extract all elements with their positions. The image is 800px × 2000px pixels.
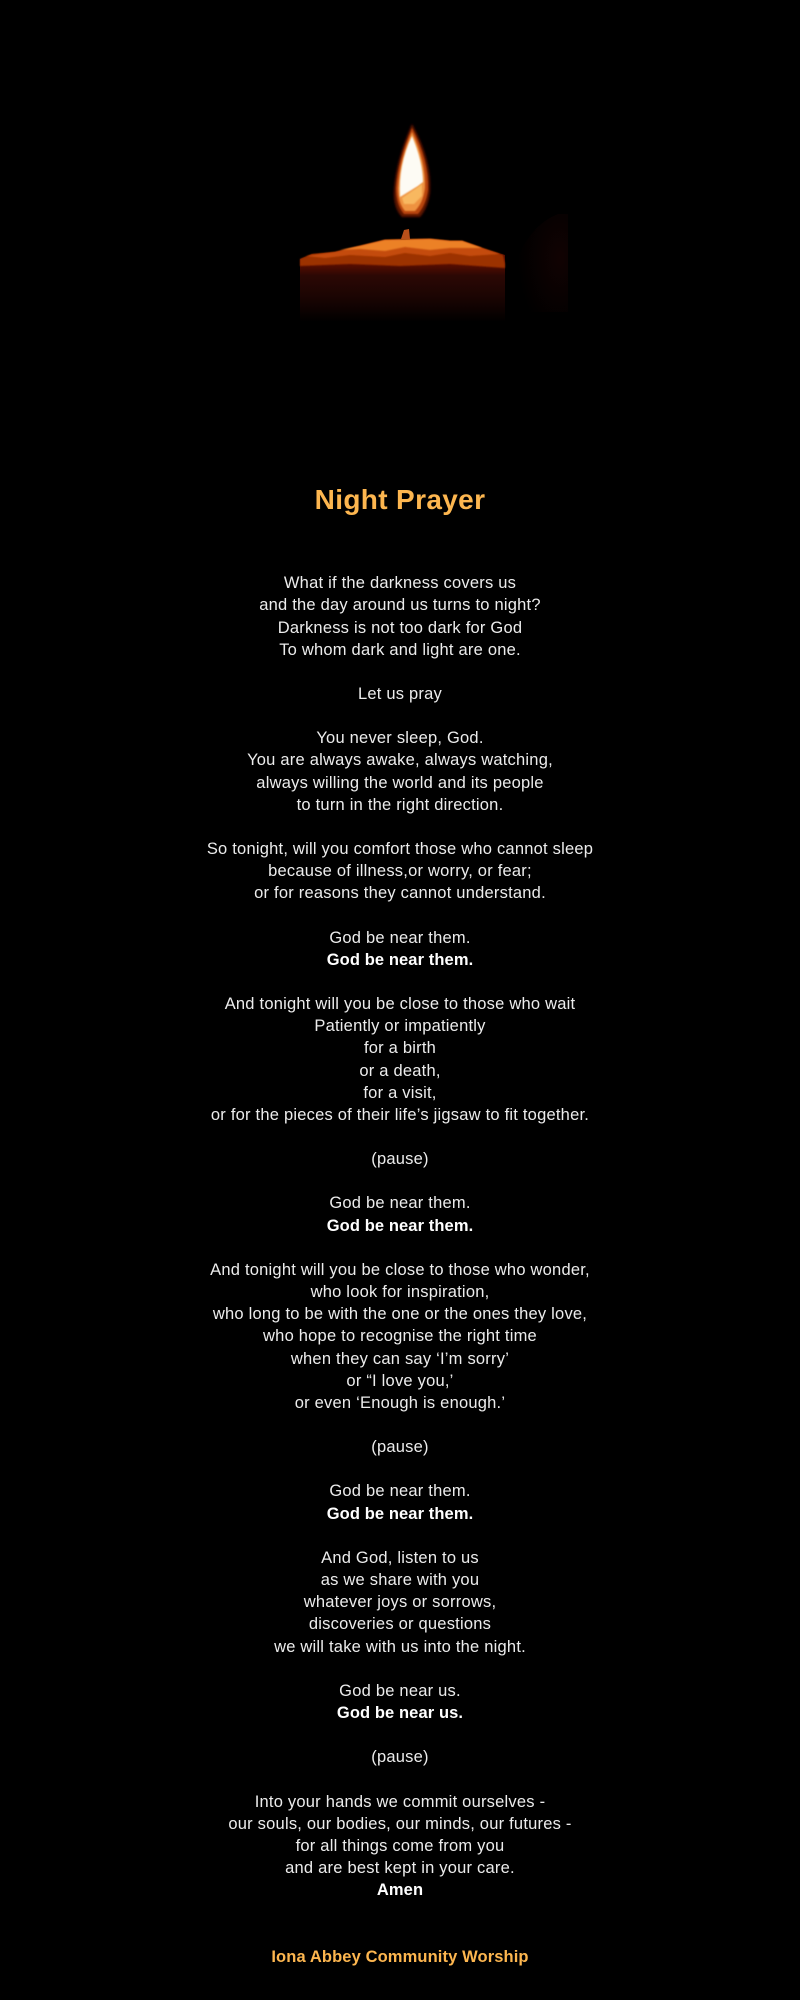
stanza: opening: Darkness is not too dark for God xyxy=(278,618,522,636)
stanza: closing: Into your hands we commit ourselves - xyxy=(255,1793,545,1811)
response: God be near them. xyxy=(327,1217,473,1235)
response: God be near us. xyxy=(339,1682,461,1700)
stanza: opening xyxy=(259,574,541,659)
stanza: closing xyxy=(228,1793,572,1899)
flame xyxy=(394,124,430,217)
response xyxy=(327,929,473,969)
stanza: those who cannot sleep: because of illness,or worry, or fear; xyxy=(268,862,532,880)
stanza: those who wait: And tonight will you be close to those who wait xyxy=(225,995,575,1013)
stanza: listen to us: we will take with us into the night. xyxy=(274,1638,526,1656)
stanza: opening: To whom dark and light are one. xyxy=(279,641,521,659)
response: God be near them. xyxy=(329,929,471,947)
stanza: those who cannot sleep: So tonight, will you comfort those who cannot sleep xyxy=(207,840,593,858)
stanza: you never sleep xyxy=(247,729,553,814)
stanza: you never sleep: You never sleep, God. xyxy=(316,729,484,747)
response: God be near them. xyxy=(327,951,473,969)
stanza: those who wonder: who hope to recognise the right time xyxy=(263,1327,537,1345)
stanza: those who wonder: And tonight will you be close to those who wonder, xyxy=(210,1261,590,1279)
stanza: listen to us xyxy=(274,1549,526,1656)
illustration: lit candle xyxy=(299,124,568,314)
stanza: those who wonder xyxy=(210,1261,590,1412)
credit: Iona Abbey Community Worship xyxy=(271,1948,529,1966)
faint reflection right of the candle xyxy=(515,214,568,312)
stanza: closing: and are best kept in your care. xyxy=(285,1859,515,1877)
stanza: those who cannot sleep: or for reasons they cannot understand. xyxy=(254,884,546,902)
stanza: those who wonder: when they can say ‘I’m sorry’ xyxy=(291,1350,509,1368)
stanza: listen to us: whatever joys or sorrows, xyxy=(304,1593,496,1611)
title: Night Prayer xyxy=(315,484,485,515)
pause: (pause) xyxy=(371,1438,429,1456)
stanza: you never sleep: always willing the world and its people xyxy=(256,774,544,792)
stanza: listen to us: as we share with you xyxy=(321,1571,479,1589)
pause: (pause) xyxy=(371,1150,429,1168)
response: God be near them. xyxy=(327,1505,473,1523)
stanza: you never sleep: You are always awake, always watching, xyxy=(247,751,553,769)
stanza: opening: and the day around us turns to night? xyxy=(259,596,541,614)
response xyxy=(327,1482,473,1523)
stanza: those who wonder: who look for inspiration, xyxy=(311,1283,489,1301)
stanza: those who wait: Patiently or impatiently xyxy=(314,1017,486,1035)
pause: (pause) xyxy=(371,1748,429,1766)
stanza: let us pray: Let us pray xyxy=(358,685,442,703)
stanza: closing: Amen xyxy=(377,1881,423,1899)
response: God be near them. xyxy=(329,1482,471,1500)
stanza: those who wonder: or even ‘Enough is enough.’ xyxy=(295,1394,505,1412)
stanza: those who wonder: or “I love you,’ xyxy=(346,1372,454,1390)
prayer text xyxy=(207,574,593,1899)
stanza: those who wait xyxy=(211,995,589,1124)
stanza: those who wait: for a visit, xyxy=(363,1084,437,1102)
stanza: closing: our souls, our bodies, our minds, our futures - xyxy=(228,1815,572,1833)
response xyxy=(337,1682,463,1722)
stanza: closing: for all things come from you xyxy=(296,1837,504,1855)
stanza: listen to us: And God, listen to us xyxy=(321,1549,479,1567)
stanza: you never sleep: to turn in the right direction. xyxy=(297,796,503,814)
response xyxy=(327,1194,473,1235)
stanza: listen to us: discoveries or questions xyxy=(309,1615,491,1633)
stanza: those who wait: or a death, xyxy=(359,1062,441,1080)
stanza: opening: What if the darkness covers us xyxy=(284,574,516,592)
wick xyxy=(401,229,410,239)
stanza: those who cannot sleep xyxy=(207,840,593,902)
stanza: those who wait: or for the pieces of their life’s jigsaw to fit together. xyxy=(211,1106,589,1124)
stanza: those who wait: for a birth xyxy=(364,1039,436,1057)
candle body xyxy=(300,229,505,322)
stanza: those who wonder: who long to be with the one or the ones they love, xyxy=(213,1305,587,1323)
response: God be near them. xyxy=(329,1194,471,1212)
response: God be near us. xyxy=(337,1704,463,1722)
